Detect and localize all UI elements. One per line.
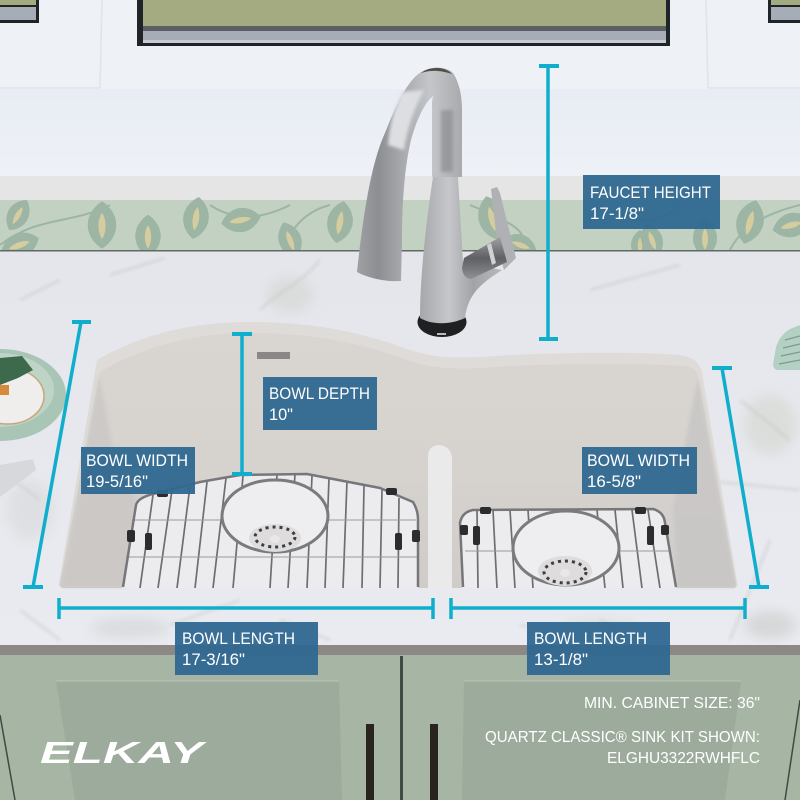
faucet spout	[357, 68, 462, 281]
faucet spout highlight	[388, 90, 424, 150]
label: faucet height: FAUCET HEIGHT	[590, 183, 711, 202]
left side wall shade	[62, 375, 137, 587]
label: left bowl length: BOWL LENGTH	[182, 629, 295, 648]
cabinet	[0, 655, 800, 800]
label: bowl depth: 10"	[269, 405, 293, 424]
label: right bowl length	[527, 622, 670, 675]
faucet base	[418, 307, 466, 337]
cabinet handle left	[366, 724, 374, 800]
faucet	[357, 68, 516, 337]
sink ring right	[513, 511, 619, 585]
dimension line: left bowl width	[23, 322, 91, 587]
label: left bowl width	[81, 447, 195, 494]
label: bowl depth	[263, 377, 377, 430]
faucet tube shade	[441, 110, 453, 172]
text: sink kit shown	[485, 729, 760, 767]
centre divider	[428, 445, 452, 588]
dimension line: right bowl length	[451, 598, 745, 619]
faucet spout tip shade	[421, 68, 452, 74]
right window corner	[768, 0, 800, 23]
window sill top	[0, 89, 800, 177]
window sill front edge	[0, 176, 800, 201]
label: right bowl width: BOWL WIDTH	[587, 451, 690, 470]
label: faucet height	[583, 175, 720, 229]
counter front edge	[0, 645, 800, 656]
right side wall shade	[673, 378, 736, 587]
countertop	[0, 251, 800, 646]
bowl interior	[60, 333, 736, 588]
drain left	[249, 524, 301, 552]
faucet hub	[462, 237, 507, 279]
centre window	[137, 0, 670, 46]
sink floor left	[122, 474, 418, 588]
cabinet handle right	[430, 724, 438, 800]
label: right bowl width	[582, 447, 697, 494]
left wire rack	[123, 474, 420, 588]
faucet body	[420, 177, 502, 323]
faucet lever handle	[491, 187, 516, 270]
touch indicator	[437, 333, 446, 335]
window wall background	[0, 0, 800, 90]
plate with food	[0, 349, 66, 441]
left window corner	[0, 0, 39, 23]
label: right bowl length: BOWL LENGTH	[534, 629, 647, 648]
text: sink kit shown: ELGHU3322RWHFLC	[607, 750, 760, 767]
rack clips right	[460, 507, 669, 545]
sink logo plate	[257, 352, 290, 359]
marble soft patches	[6, 277, 796, 639]
marble veining	[0, 258, 800, 640]
dimension line: bowl depth	[232, 334, 252, 474]
label: left bowl width: 19-5/16"	[86, 472, 148, 491]
label: left bowl length: 17-3/16"	[182, 650, 245, 669]
label: right bowl length: 13-1/8"	[534, 650, 588, 669]
logo: Elkay: ELKAY	[40, 735, 208, 770]
drain right	[538, 556, 592, 586]
label: right bowl width: 16-5/8"	[587, 472, 641, 491]
label: bowl depth: BOWL DEPTH	[269, 384, 370, 403]
dimension line: faucet height	[539, 66, 559, 339]
right wire rack	[460, 507, 676, 588]
sink ring left	[222, 480, 328, 552]
text: minimum cabinet size: MIN. CABINET SIZE: 36"	[584, 695, 760, 712]
dimension line: left bowl length	[59, 598, 433, 619]
dimension line: right bowl width	[712, 368, 769, 587]
text: sink kit shown: QUARTZ CLASSIC® SINK KIT SHOWN:	[485, 729, 760, 746]
sink rim	[59, 322, 737, 588]
label: faucet height: 17-1/8"	[590, 204, 644, 223]
faucet hub collar	[487, 243, 496, 265]
rack clips left	[127, 488, 420, 550]
sink floor right	[459, 509, 676, 588]
spatula	[773, 325, 800, 370]
backsplash with leaf pattern	[0, 193, 800, 263]
napkin	[0, 459, 36, 497]
sink	[59, 322, 737, 588]
label: left bowl width: BOWL WIDTH	[86, 451, 188, 470]
backsplash shadow line	[0, 250, 800, 252]
label: left bowl length	[175, 622, 318, 675]
window frame shading	[0, 0, 800, 88]
